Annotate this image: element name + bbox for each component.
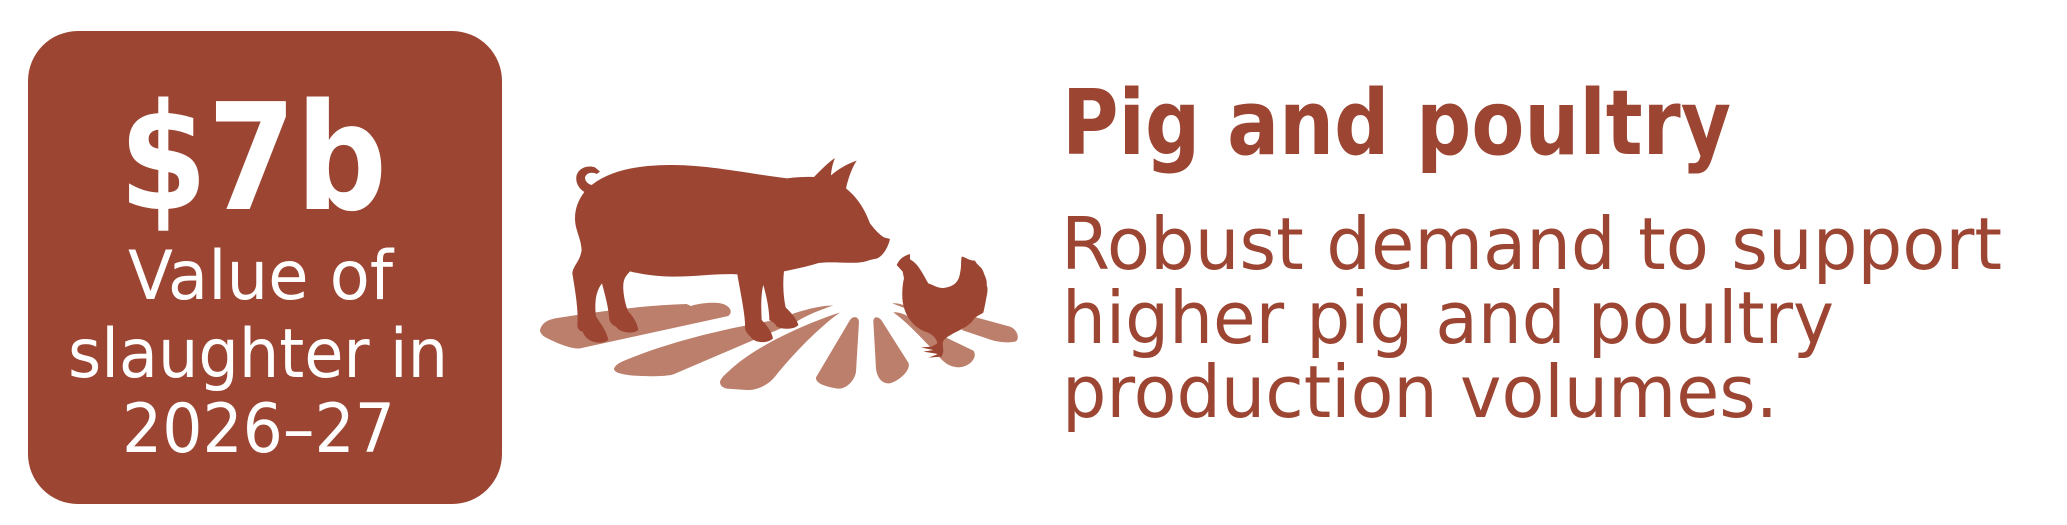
icon: pig: [572, 158, 890, 343]
icon: hen: [897, 254, 988, 358]
stat: $7b: $7b: [119, 72, 387, 244]
body text: higher pig and poultry: [1062, 276, 1834, 360]
stat label: 2026–27: [122, 390, 395, 469]
body text: Robust demand to support: [1061, 202, 2002, 286]
body text: production volumes.: [1062, 350, 1778, 434]
icon: ground shadows: [540, 303, 1018, 390]
icon: pig and hen on feed: [540, 158, 1018, 390]
stat label: [68, 237, 448, 469]
panel: value of slaughter: [28, 31, 502, 504]
stat label: slaughter in: [68, 315, 448, 394]
heading: Pig and poultry: [1062, 71, 1731, 176]
body text: [1061, 202, 2002, 434]
stat label: Value of: [128, 237, 395, 316]
